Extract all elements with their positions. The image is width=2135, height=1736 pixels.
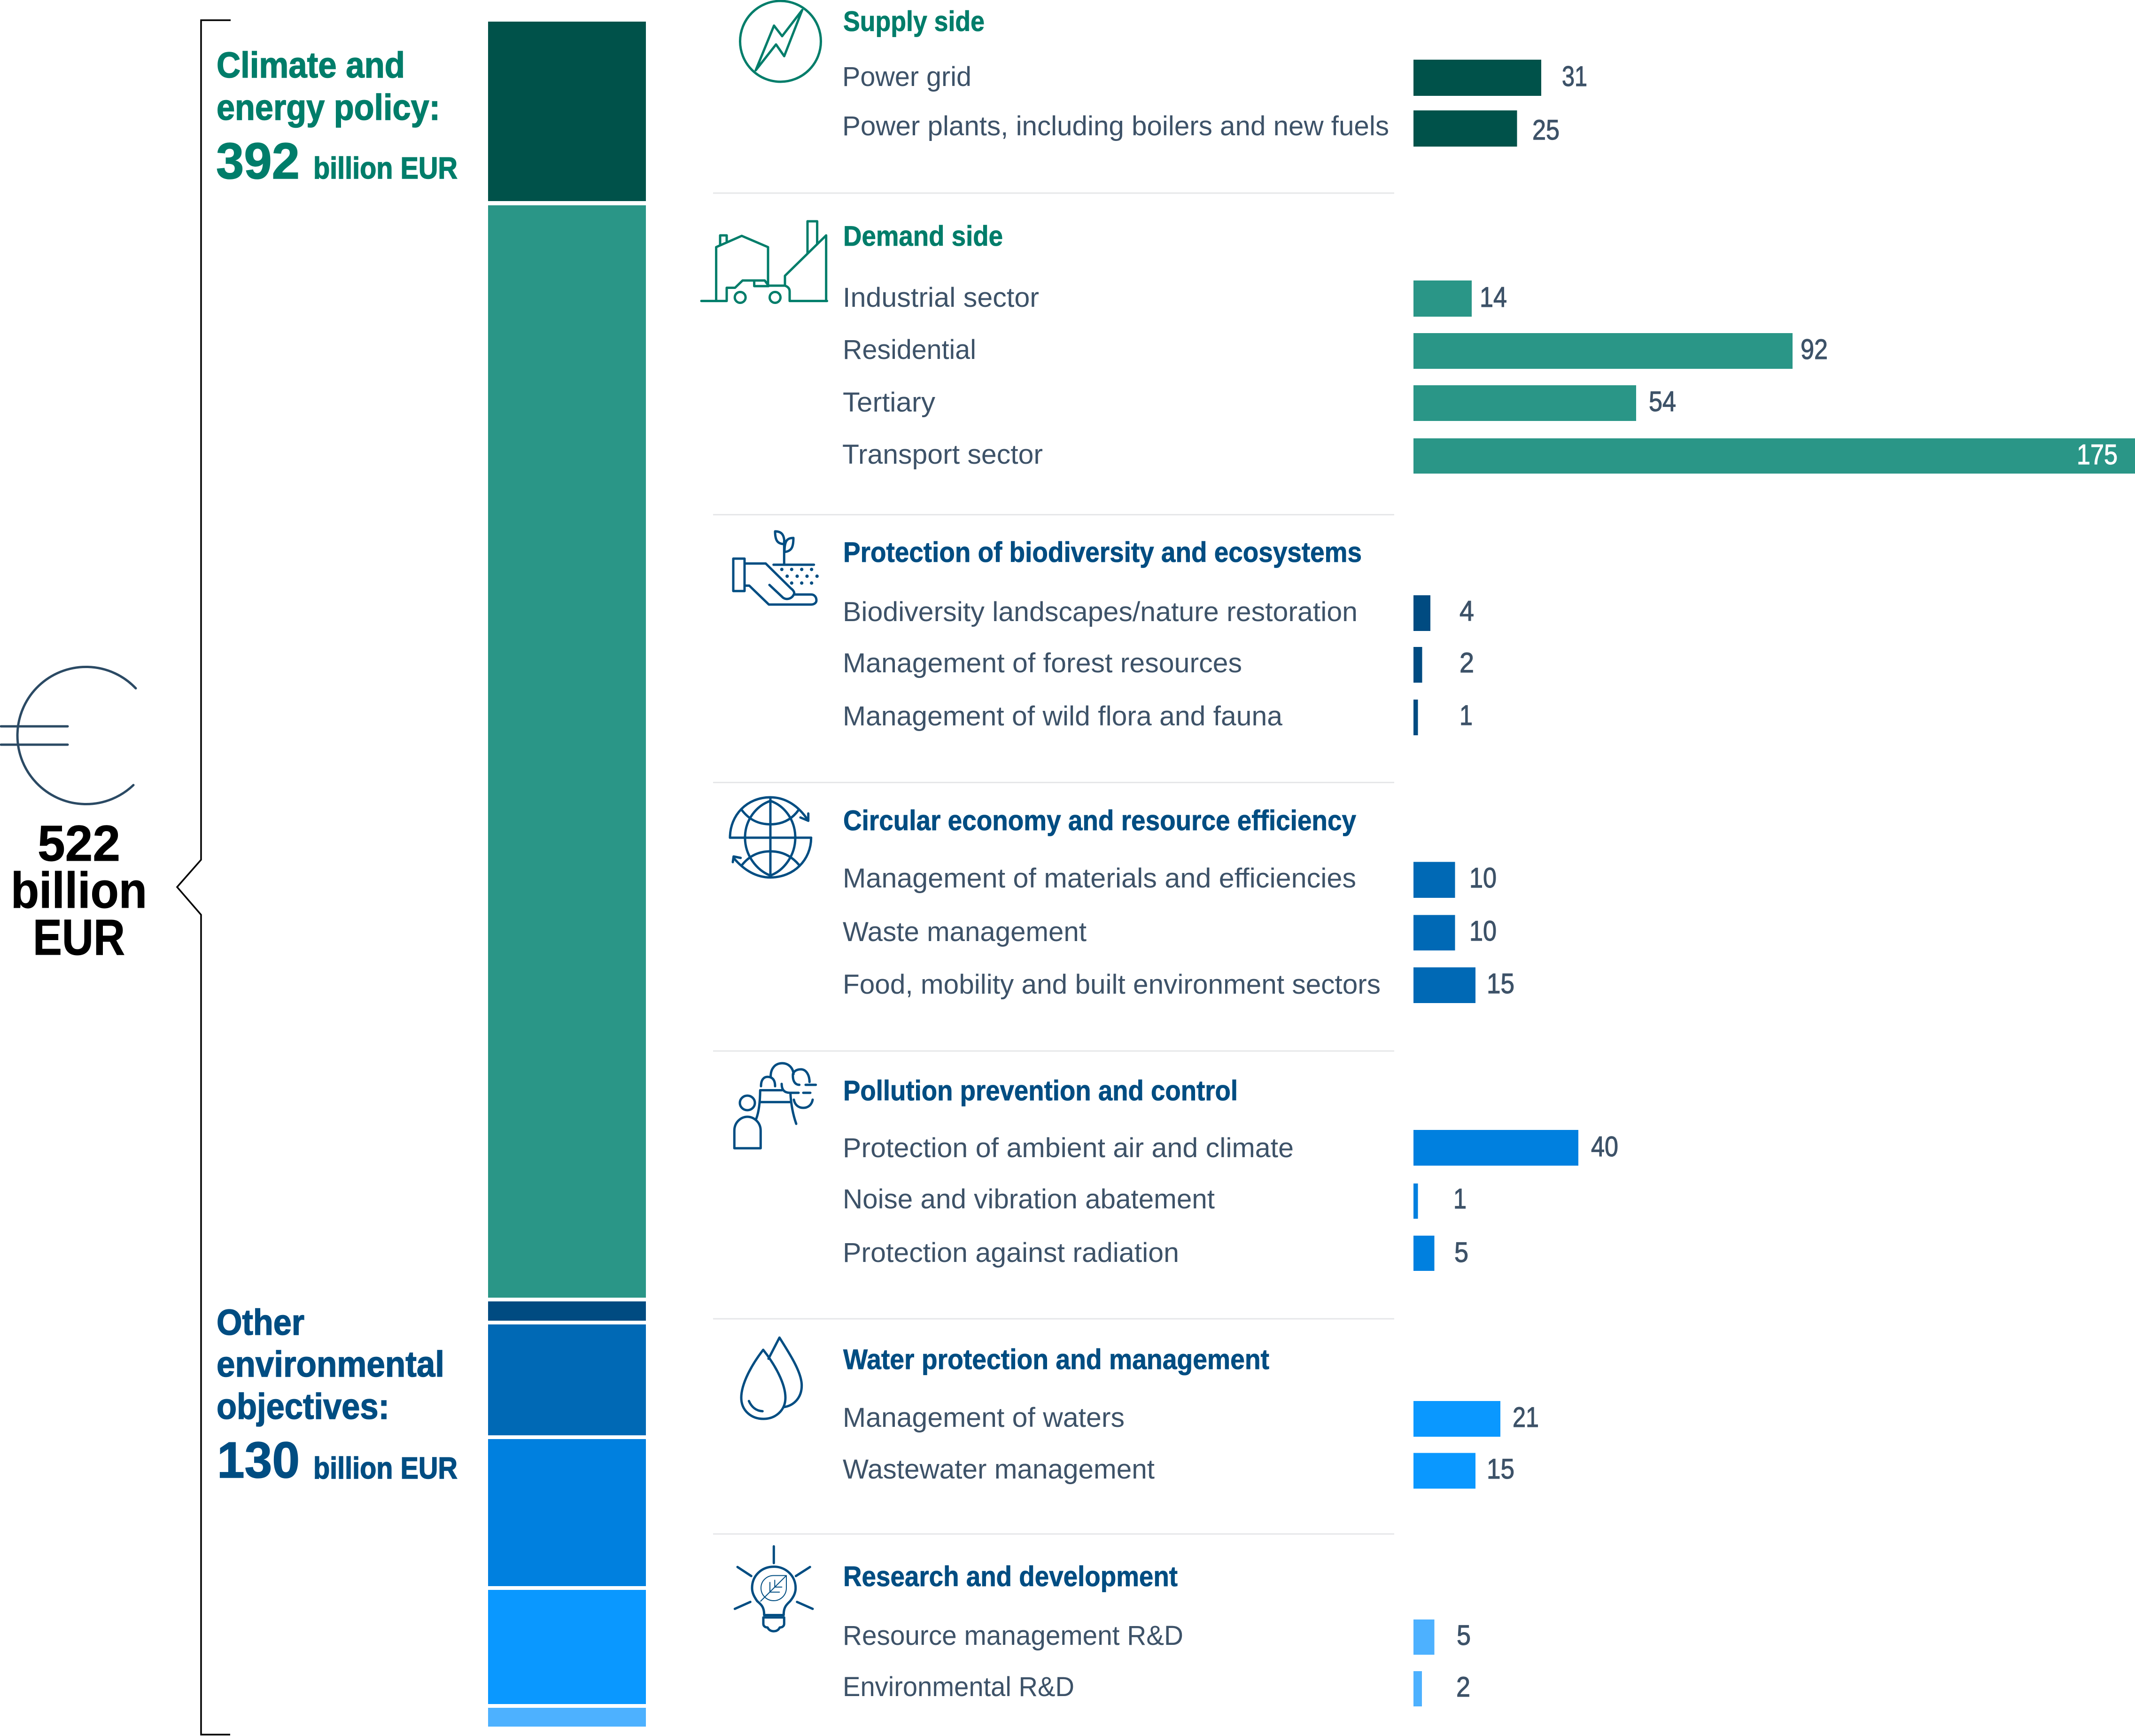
heading: other environmental objectives — [217, 1302, 458, 1489]
panel: total amount — [1, 667, 147, 965]
row: tertiary — [843, 385, 1676, 421]
row: tertiary: Tertiary — [843, 387, 935, 418]
heading: other environmental objectives: Other — [217, 1302, 304, 1343]
row: wild flora and fauna: Management of wild flora and fauna — [843, 701, 1283, 732]
row: waste management — [843, 915, 1497, 950]
row: environmental R&D: 2 — [1456, 1671, 1470, 1703]
row: power plants — [842, 110, 1560, 147]
panel: pollution prevention — [734, 1063, 1618, 1271]
total value: EUR — [33, 909, 125, 965]
row: tertiary: 54 — [1649, 386, 1676, 417]
panel: demand side — [701, 220, 2135, 474]
row: ambient air — [843, 1130, 1618, 1166]
panel: water protection — [741, 1338, 1539, 1488]
icon: euro sign — [1, 667, 136, 804]
row: power plants: 25 — [1532, 114, 1560, 146]
heading: climate and energy policy: 392 — [216, 132, 300, 190]
row: transport sector — [842, 438, 2135, 474]
row: resource management: 5 — [1457, 1619, 1471, 1651]
row: forest resources: 2 — [1460, 647, 1474, 678]
heading: other environmental objectives: environmental — [217, 1344, 444, 1385]
heading: climate and energy policy: Climate and — [217, 45, 405, 86]
heading: climate and energy policy — [216, 45, 458, 190]
row: wastewater: Wastewater management — [843, 1454, 1155, 1485]
icon: hand with seedling — [733, 531, 819, 605]
row: materials and efficiencies: 10 — [1469, 862, 1497, 894]
heading: supply side: Supply side — [843, 6, 985, 37]
row: transport sector: 175 — [2077, 439, 2118, 470]
row: industrial sector: 14 — [1480, 281, 1507, 313]
row: noise: Noise and vibration abatement — [843, 1184, 1215, 1214]
panel: supply side — [740, 1, 1587, 147]
row: food mobility built environment: 15 — [1487, 968, 1514, 999]
row: food mobility built environment — [843, 967, 1514, 1003]
row: resource management: Resource management R&D — [843, 1620, 1183, 1651]
row: management of waters: 21 — [1513, 1401, 1539, 1433]
bracket — [177, 20, 231, 1735]
row: wild flora and fauna: 1 — [1460, 700, 1473, 731]
row: radiation: 5 — [1454, 1237, 1468, 1268]
row: materials and efficiencies — [843, 862, 1497, 898]
heading: research: Research and development — [843, 1561, 1178, 1592]
row: power grid — [842, 60, 1587, 96]
total value: billion — [11, 862, 147, 919]
total value: 522 — [38, 815, 120, 872]
row: biodiversity landscapes: Biodiversity landscapes/nature restoration — [843, 597, 1358, 627]
row: management of waters: Management of waters — [843, 1402, 1125, 1433]
stacked bar chart — [488, 22, 646, 1727]
row: waste management: 10 — [1469, 915, 1497, 947]
row: forest resources — [843, 647, 1474, 683]
row: management of waters — [843, 1401, 1539, 1437]
row: food mobility built environment: Food, mobility and built environment sectors — [843, 969, 1381, 1000]
row: biodiversity landscapes — [843, 595, 1474, 631]
heading: other environmental objectives: objectives: — [217, 1386, 389, 1427]
heading: water: Water protection and management — [843, 1344, 1269, 1375]
icon: person and pollution cloud — [734, 1063, 816, 1148]
row: residential: Residential — [843, 335, 976, 365]
row: industrial sector — [843, 280, 1507, 317]
row: radiation — [843, 1236, 1468, 1271]
heading: pollution: Pollution prevention and control — [843, 1075, 1238, 1106]
total value — [11, 815, 147, 965]
panel: protection of biodiversity and ecosystems — [733, 531, 1474, 735]
heading: biodiversity: Protection of biodiversity and ecosystems — [843, 537, 1362, 568]
panel: circular economy — [730, 797, 1514, 1003]
row: ambient air: Protection of ambient air and climate — [843, 1133, 1294, 1163]
heading: demand side: Demand side — [843, 220, 1003, 252]
row: materials and efficiencies: Management of materials and efficiencies — [843, 863, 1356, 894]
row: wild flora and fauna — [843, 700, 1473, 735]
row: waste management: Waste management — [843, 917, 1087, 947]
panel: research and development — [735, 1546, 1471, 1706]
icon: lightning circle — [740, 1, 821, 82]
row: forest resources: Management of forest resources — [843, 648, 1242, 678]
heading: other environmental objectives: 130 — [217, 1432, 300, 1489]
heading: other environmental objectives: billion EUR — [313, 1451, 458, 1485]
row: ambient air: 40 — [1591, 1131, 1618, 1162]
row: power plants: Power plants, including boilers and new fuels — [842, 111, 1389, 141]
row: power grid: 31 — [1562, 61, 1587, 92]
row: wastewater: 15 — [1487, 1453, 1514, 1485]
heading: circular economy: Circular economy and resource efficiency — [843, 805, 1357, 836]
row: wastewater — [843, 1453, 1514, 1488]
icon: light bulb with leaf — [735, 1546, 813, 1631]
icon: water drops — [741, 1338, 802, 1419]
row: noise — [843, 1183, 1467, 1219]
row: radiation: Protection against radiation — [843, 1238, 1179, 1268]
row: resource management — [843, 1619, 1471, 1655]
row: noise: 1 — [1453, 1183, 1467, 1214]
icon: globe with arrows — [730, 797, 811, 878]
row: transport sector: Transport sector — [842, 439, 1043, 470]
heading: climate and energy policy: energy policy: — [217, 87, 440, 128]
icon: factory and tractor — [701, 221, 827, 303]
row: residential — [843, 333, 1828, 369]
row: industrial sector: Industrial sector — [843, 282, 1039, 313]
row: environmental R&D — [843, 1671, 1470, 1706]
row: environmental R&D: Environmental R&D — [843, 1672, 1074, 1702]
row: biodiversity landscapes: 4 — [1460, 595, 1474, 627]
heading: climate and energy policy: billion EUR — [313, 151, 458, 185]
row: residential: 92 — [1801, 334, 1828, 365]
row: power grid: Power grid — [842, 62, 971, 92]
